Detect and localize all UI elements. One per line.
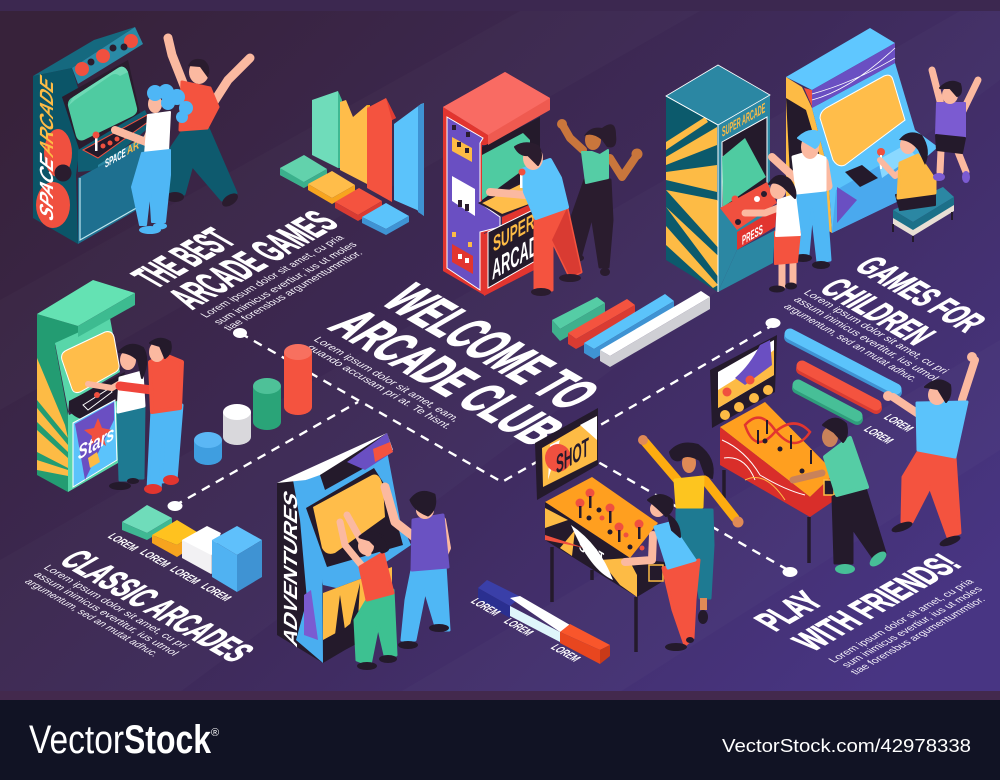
- title: welcome to arcade club: [316, 276, 614, 454]
- labels: stacked bar lorem: LOREM: [467, 596, 504, 618]
- text block: games for children: assum inimicus evertitur, ius utmol: [790, 295, 941, 383]
- arcade machine: super arcade red: SUPER: [493, 208, 535, 257]
- text block: best arcade games: tiae forensbus argumentummtior.: [221, 249, 366, 333]
- arcade machine: adventures: [277, 433, 411, 663]
- heading: the best arcade games: [122, 205, 349, 315]
- heading: play with friends: [746, 549, 971, 657]
- labels: stacked bar lorem: LOREM: [547, 642, 584, 664]
- text block: play with friends: sum inimicus evertiur, ius ut moles: [839, 585, 986, 670]
- labels: stacked bar lorem: LOREM: [500, 616, 537, 638]
- pinball table: shot: SHOT: [579, 537, 604, 569]
- text block: games for children: Lorem ipsum dolor sit amet, cu pri: [800, 288, 951, 376]
- text block: games for children: argumentum, sed an mutat adhuc.: [780, 302, 921, 384]
- dashed connector lines: [168, 318, 798, 577]
- arcade machine: super arcade red: [443, 72, 550, 296]
- arcade machine: space arcade: ARCADE: [36, 71, 57, 161]
- labels: classic arcades lorem: LOREM: [136, 547, 174, 569]
- labels: classic arcades lorem: LOREM: [197, 581, 235, 603]
- text block: best arcade games: Lorem ipsum dolor sit amet, cu pria: [198, 233, 348, 320]
- labels: classic arcades lorem: [104, 531, 235, 603]
- footer band: [0, 700, 1000, 780]
- people: couple at stars machine: [88, 339, 182, 494]
- cylinder chart: [194, 344, 312, 465]
- people: man in blue shirt and dancing woman: [490, 119, 642, 296]
- heading: the best arcade games: ARCADE GAMES: [158, 205, 349, 315]
- arcade machine: super arcade rays: PRESS: [742, 221, 763, 248]
- people: man in red and blue-haired woman: [115, 38, 250, 234]
- people: father and child, seated girl, jumping boy: [745, 70, 978, 292]
- pinball table: shot: [535, 408, 665, 652]
- arcade machine: space arcade: AR: [127, 137, 139, 158]
- text block: welcome: quando accusam pri at. Te hisnt.: [303, 343, 455, 431]
- text block: best arcade games: sum inimicus evertiur, ius ut moles: [211, 240, 361, 327]
- bar chart: horizontal sticks: [552, 291, 710, 367]
- text block: classic arcades: Lorem ipsum dolor sit amet, cu pri: [40, 563, 191, 651]
- arcade machine: space arcade: SPACE: [105, 145, 126, 171]
- heading: games for children: [810, 251, 994, 351]
- labels: stacked bar lorem: [467, 596, 584, 664]
- text block: classic arcades: assum inimicus evertitur, ius utmol: [30, 570, 181, 658]
- rounded bars chart: [790, 334, 896, 419]
- arcade machine: super arcade rays: SUPER ARCADE: [722, 99, 765, 140]
- watermark logo: ®: [211, 727, 219, 739]
- text block: play with friends: tiae forensbus argumentummtior.: [848, 595, 988, 677]
- bar chart: isometric columns: [280, 91, 424, 235]
- arcade machine: stars: Stars: [78, 422, 114, 465]
- watermark logo: Vector: [29, 718, 124, 762]
- labels: rounded bars lorem: LOREM: [860, 424, 897, 446]
- arcade machine: super arcade rays: [666, 65, 777, 292]
- title: welcome to arcade club: ARCADE CLUB: [316, 302, 577, 454]
- arcade machine: adventures: ADVENTURES: [280, 486, 301, 651]
- pinball table: shot: SHOT: [556, 431, 589, 480]
- watermark logo: [29, 718, 219, 762]
- arcade machine: space arcade: [33, 27, 152, 244]
- text block: play with friends: Lorem ipsum dolor sit amet, cu pria: [826, 577, 978, 665]
- heading: classic arcades: CLASSIC ARCADES: [50, 545, 262, 668]
- watermark url: VectorStock.com/42978338: [722, 735, 971, 756]
- people: players at adventures: [340, 487, 449, 670]
- labels: classic arcades lorem: LOREM: [104, 531, 142, 553]
- cube chart: [122, 505, 262, 592]
- text block: welcome: Lorem ipsum dolor sit amet, eam,: [310, 335, 463, 424]
- heading: the best arcade games: THE BEST: [122, 222, 246, 294]
- labels: classic arcades lorem: LOREM: [166, 564, 204, 586]
- text block: classic arcades: argumentum, sed an mutat adhuc.: [21, 577, 162, 659]
- people: women at the shot pinball: [625, 435, 744, 651]
- title: welcome to arcade club: WELCOME TO: [369, 276, 614, 418]
- arcade machine: super arcade red: ARCAD: [492, 228, 538, 286]
- watermark logo: Stock: [124, 718, 212, 762]
- arcade machine: light blue kids cabinet: [786, 28, 938, 233]
- pinball table: flowers: [710, 335, 835, 563]
- bench: [893, 187, 954, 242]
- arcade machine: space arcade: SPACE: [36, 149, 57, 225]
- labels: rounded bars lorem: LOREM: [880, 412, 917, 434]
- stacked bar chart: [478, 580, 610, 664]
- heading: play with friends: PLAY: [746, 586, 833, 637]
- arcade machine: stars: [37, 280, 135, 492]
- labels: rounded bars lorem: [860, 412, 917, 446]
- people: men at the flowers pinball: [793, 352, 977, 574]
